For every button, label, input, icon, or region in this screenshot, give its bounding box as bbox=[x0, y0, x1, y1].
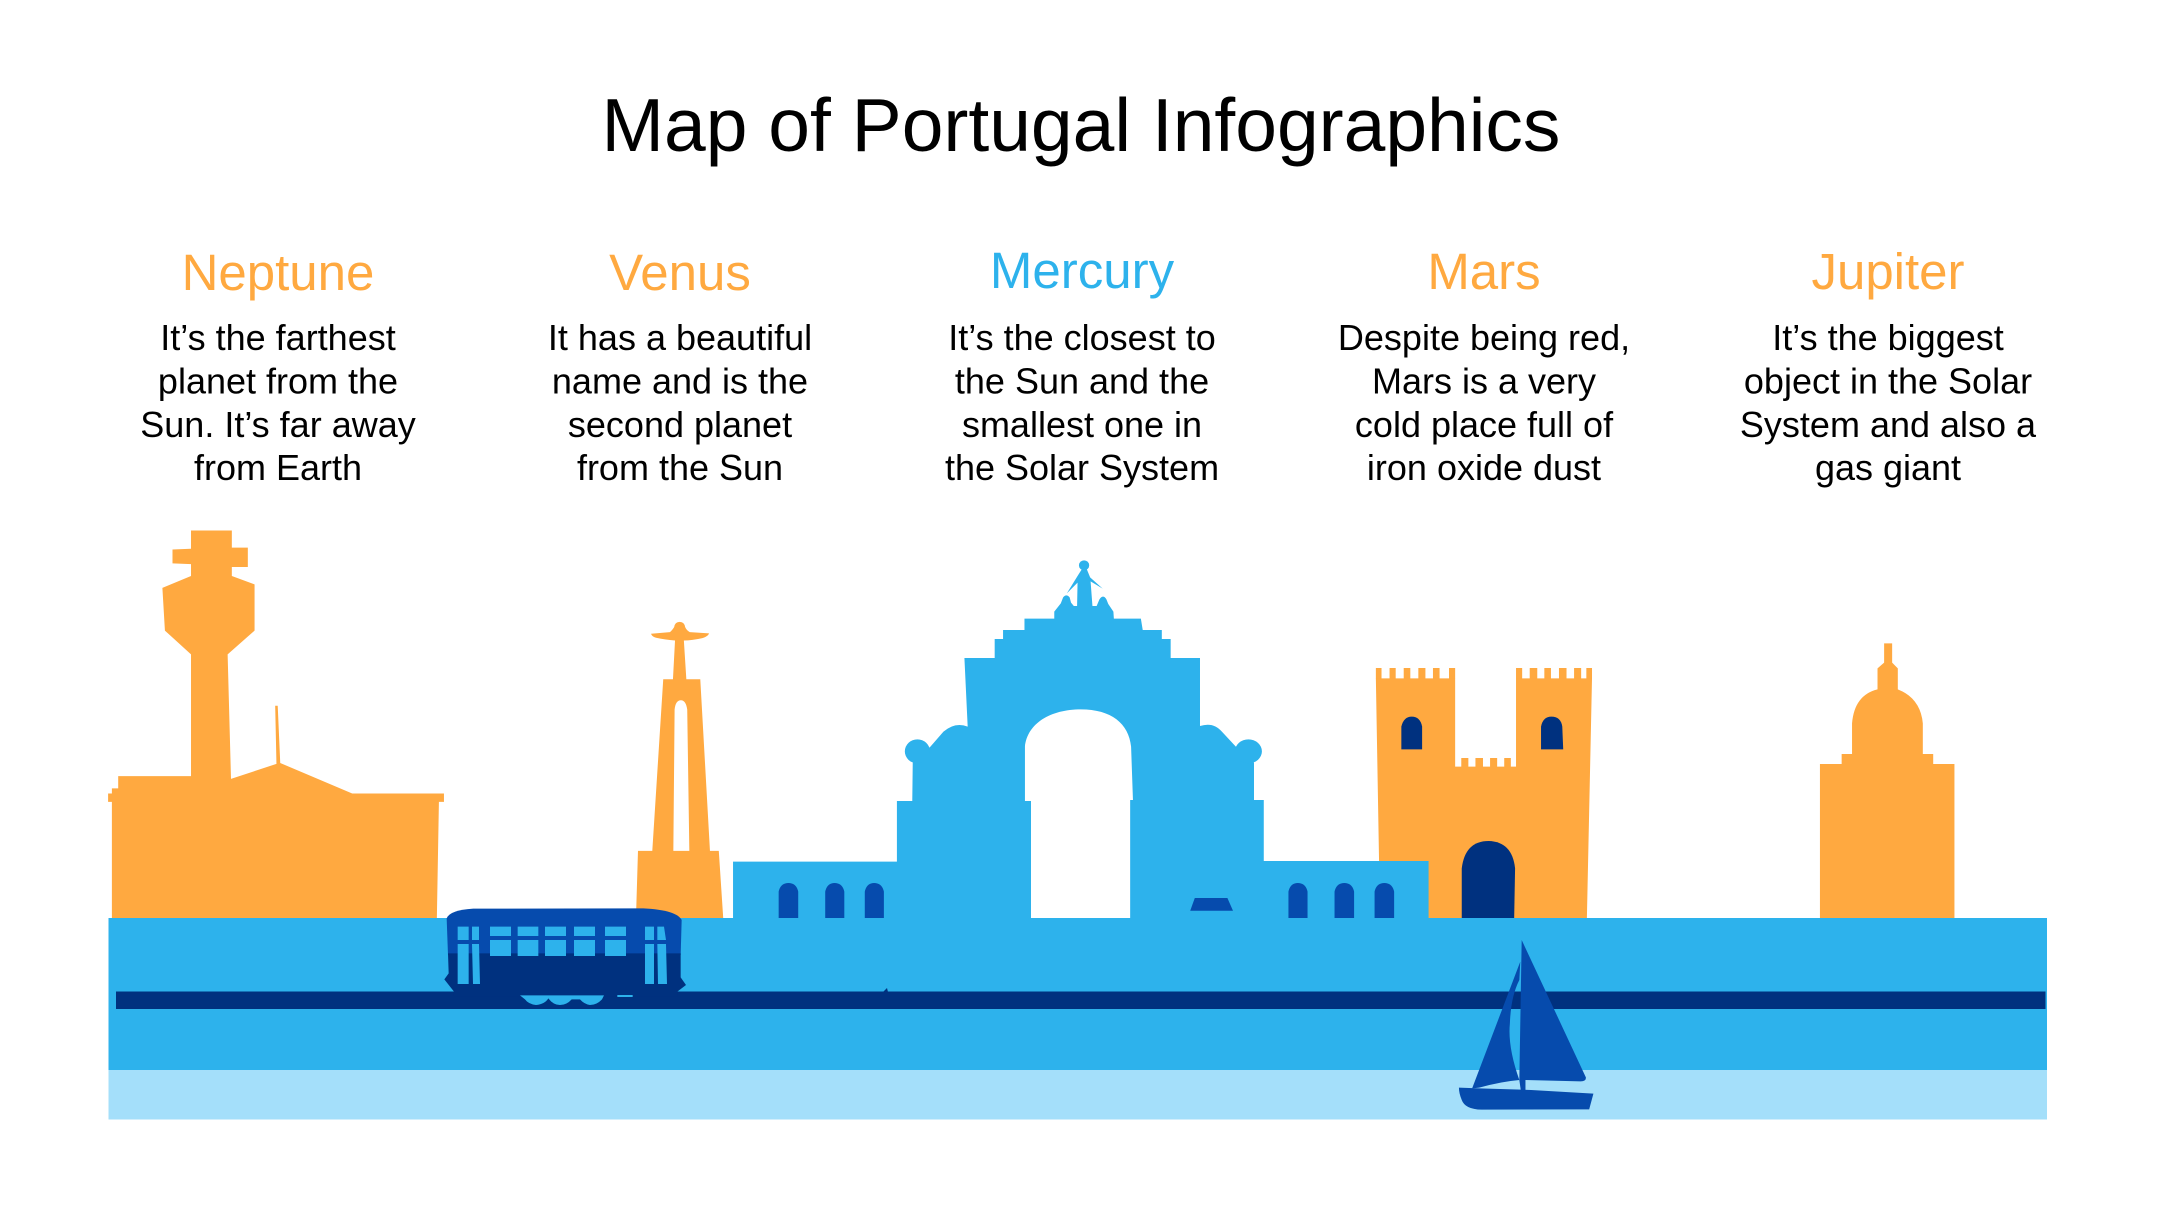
tram door left bbox=[458, 927, 480, 984]
text: Neptune description: planet from the bbox=[158, 360, 398, 401]
castle window left bbox=[1401, 717, 1422, 749]
text: Mars description: Mars is a very bbox=[1372, 360, 1596, 401]
tram lower body bbox=[444, 953, 686, 997]
text: Neptune description: Sun. It’s far away bbox=[140, 404, 416, 445]
heading: Neptune: Neptune bbox=[182, 244, 374, 301]
text: Venus description: name and is the bbox=[552, 360, 808, 401]
column: Venus bbox=[548, 244, 812, 488]
small mark on rail bbox=[883, 988, 888, 992]
text: Jupiter description: It’s the biggest bbox=[1772, 317, 2004, 358]
boat hull bbox=[1459, 1088, 1593, 1110]
arched windows right wing bbox=[1288, 883, 1394, 919]
text: Neptune description bbox=[140, 317, 416, 488]
heading: Venus: Venus bbox=[609, 244, 751, 301]
river: main water band bbox=[108, 918, 2047, 1070]
landmark: Venus statue on pedestal bbox=[636, 622, 723, 921]
landmark: Mercury triumphal arch with wings bbox=[733, 560, 1429, 920]
text: Jupiter description: object in the Solar bbox=[1744, 360, 2032, 401]
text: Venus description: second planet bbox=[568, 404, 792, 445]
text: Venus description: from the Sun bbox=[577, 447, 783, 488]
text: Venus description: It has a beautiful bbox=[548, 317, 812, 358]
text: Mars description: iron oxide dust bbox=[1367, 447, 1601, 488]
tram step bbox=[617, 995, 633, 997]
text: Mercury description: It’s the closest to bbox=[948, 317, 1216, 358]
text: Mercury description: smallest one in bbox=[962, 404, 1202, 445]
tram rail bbox=[116, 992, 2046, 1009]
column: Neptune bbox=[140, 244, 416, 488]
text: Venus description bbox=[548, 317, 812, 488]
tram bbox=[444, 908, 686, 1005]
river: pale shoreline band bbox=[108, 1070, 2047, 1120]
castle window right bbox=[1541, 717, 1563, 749]
text: Mars description: cold place full of bbox=[1355, 404, 1614, 445]
arched windows left wing bbox=[779, 883, 884, 919]
text: Mars description bbox=[1338, 317, 1630, 488]
title: Map of Portugal Infographics bbox=[602, 83, 1560, 167]
text: Mars description: Despite being red, bbox=[1338, 317, 1630, 358]
text: Jupiter description: gas giant bbox=[1815, 447, 1961, 488]
tram roof bbox=[447, 908, 682, 955]
heading: Mercury: Mercury bbox=[990, 242, 1175, 299]
text: Jupiter description: System and also a bbox=[1740, 404, 2037, 445]
text: Neptune description: It’s the farthest bbox=[160, 317, 396, 358]
text: Mercury description bbox=[945, 317, 1219, 488]
tram windows bbox=[490, 927, 626, 956]
castle door bbox=[1462, 841, 1515, 920]
wing detail: trapezoid bbox=[1190, 898, 1233, 911]
sailboat bbox=[1459, 940, 1593, 1110]
boat left sail bbox=[1472, 962, 1520, 1088]
landmark: Neptune tower and hall bbox=[108, 531, 444, 921]
boat right sail and mast bbox=[1519, 940, 1586, 1090]
column: Mars bbox=[1338, 243, 1630, 488]
text: Mercury description: the Solar System bbox=[945, 447, 1219, 488]
text: Mercury description: the Sun and the bbox=[955, 360, 1209, 401]
heading: Jupiter: Jupiter bbox=[1811, 243, 1965, 300]
landmark: Jupiter domed tower bbox=[1820, 643, 1954, 922]
column: Mercury bbox=[945, 242, 1219, 488]
landmark: Mars castle bbox=[1376, 668, 1592, 922]
heading: Mars: Mars bbox=[1427, 243, 1541, 300]
text: Jupiter description bbox=[1740, 317, 2037, 488]
column: Jupiter bbox=[1740, 243, 2037, 488]
tram door right bbox=[645, 927, 667, 984]
tram wheels bbox=[520, 995, 604, 1005]
text: Neptune description: from Earth bbox=[194, 447, 362, 488]
